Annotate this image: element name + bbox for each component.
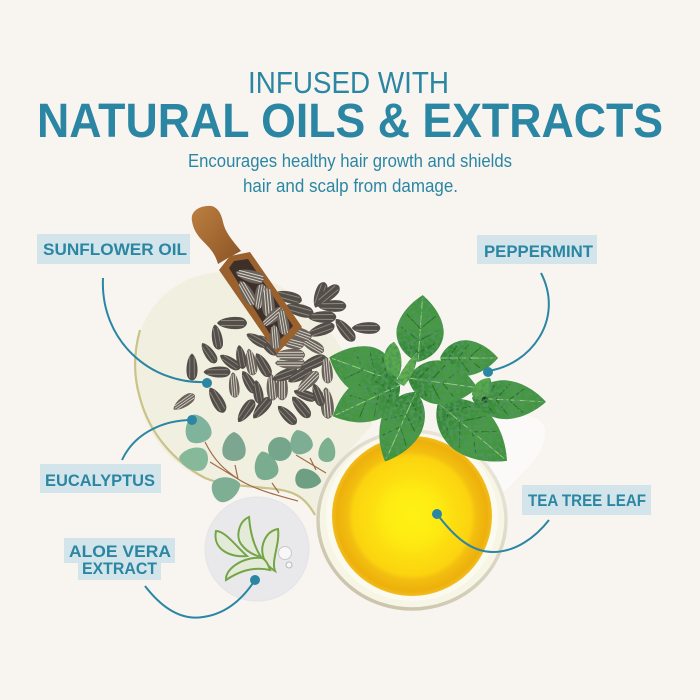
anchor dot — [250, 575, 260, 585]
callout: eucalyptus — [40, 415, 197, 493]
title line: natural oils and extracts: NATURAL OILS & EXTRACTS — [37, 95, 663, 148]
water droplets — [278, 546, 292, 560]
label box line 1 — [64, 538, 175, 563]
glass bowl of tea tree oil — [318, 431, 506, 609]
anchor dot — [187, 415, 197, 425]
subtitle text: Encourages healthy hair growth and shields — [188, 151, 512, 171]
connector line — [122, 420, 192, 460]
eucalyptus sprig — [178, 411, 337, 505]
olive oil edge — [135, 330, 315, 515]
label text: TEA TREE LEAF — [528, 491, 646, 510]
peppermint sprig — [321, 294, 547, 480]
seeds in scoop — [234, 266, 266, 286]
callout: peppermint — [477, 235, 597, 377]
label box line 2 — [78, 563, 161, 580]
connector line — [437, 514, 549, 552]
anchor dot — [202, 378, 212, 388]
anchor dot — [432, 509, 442, 519]
label box — [477, 235, 597, 264]
sunflower seeds pile — [171, 280, 380, 428]
subtitle text: hair and scalp from damage. — [243, 176, 458, 196]
wooden scoop — [192, 206, 302, 354]
label text: PEPPERMINT — [484, 242, 594, 261]
glass bowl handle — [490, 414, 545, 500]
callout: sunflower oil — [37, 234, 212, 388]
aloe slices — [215, 517, 278, 580]
label box — [37, 234, 190, 264]
title — [37, 65, 663, 148]
callout: tea tree leaf — [432, 485, 651, 552]
subtitle text — [188, 151, 512, 196]
label box — [522, 485, 651, 515]
connector line — [145, 580, 255, 618]
label text line 1: ALOE VERA — [69, 542, 171, 561]
connector line — [488, 273, 549, 371]
label text: SUNFLOWER OIL — [43, 240, 187, 259]
label text line 2: EXTRACT — [82, 559, 158, 578]
callout: aloe vera extract — [64, 538, 260, 618]
label box — [40, 464, 161, 493]
oil swatch blob — [135, 272, 372, 515]
connector line — [103, 278, 207, 382]
aloe vera dish — [205, 497, 309, 601]
label text: EUCALYPTUS — [45, 471, 155, 490]
title line: infused with: INFUSED WITH — [248, 65, 449, 100]
anchor dot — [483, 367, 493, 377]
